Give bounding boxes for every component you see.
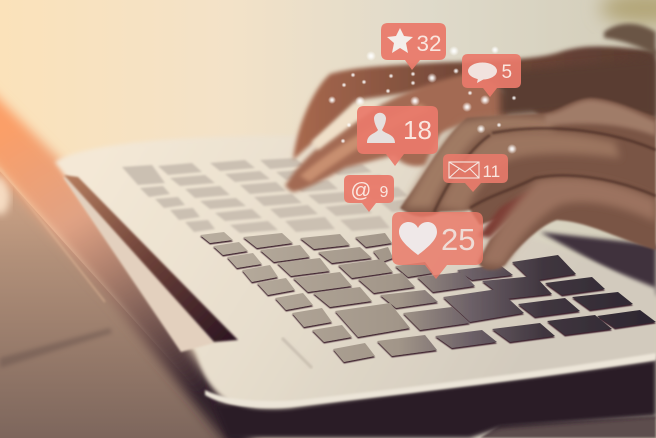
laptop screen edge and shadow (0, 70, 260, 438)
wooden table (0, 160, 240, 438)
envelope badge: 11 (482, 162, 500, 181)
person badge: 18 (403, 115, 432, 145)
light line on the table edge (0, 168, 105, 302)
at sign badge: 9 (380, 184, 388, 201)
table at lower right (480, 416, 656, 438)
heart badge (392, 212, 483, 279)
at sign badge: @ (350, 179, 371, 202)
envelope badge (443, 154, 508, 192)
speech bubble badge: 5 (502, 62, 512, 83)
heart badge: 25 (441, 222, 475, 257)
watch strap (604, 24, 656, 56)
person badge (357, 106, 438, 166)
star badge (381, 23, 446, 70)
speech bubble badge (462, 54, 521, 97)
sparkles (328, 46, 517, 154)
at sign badge (344, 175, 394, 212)
upper blurred keyboard keys (122, 158, 430, 233)
laptop base (55, 136, 656, 438)
lower keyboard keys (200, 232, 656, 362)
star badge: 32 (416, 31, 442, 56)
back hand, out of focus (285, 46, 656, 192)
front hand (400, 98, 656, 270)
